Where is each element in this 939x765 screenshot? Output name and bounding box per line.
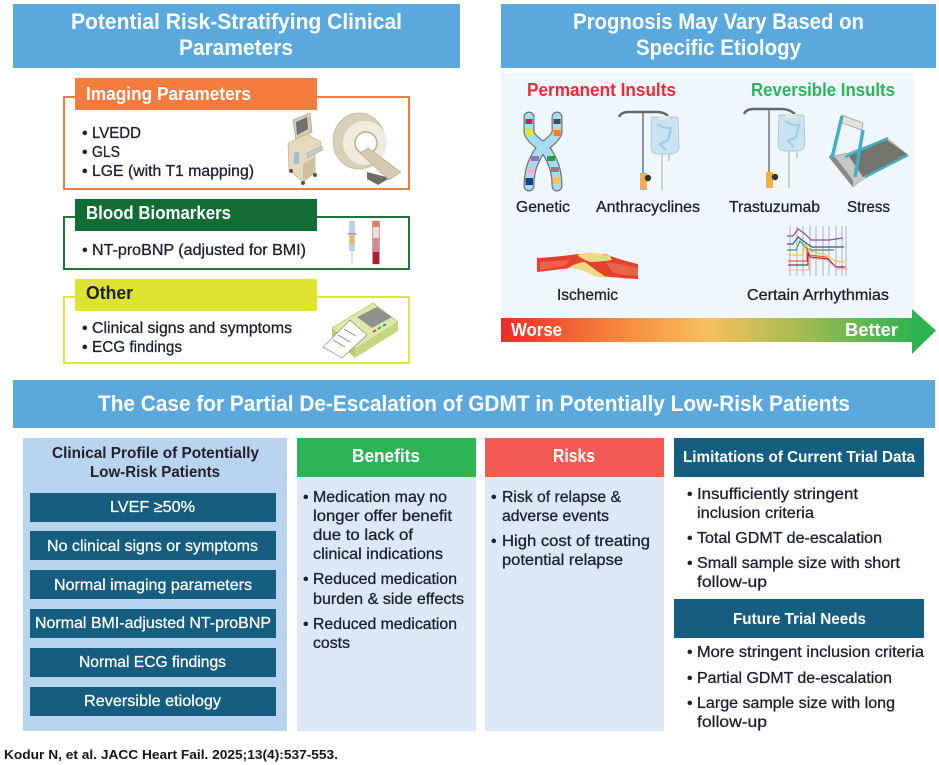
banner: the case for partial de-escalation	[13, 380, 935, 428]
list: risks: •	[491, 533, 497, 550]
list: benefits: due to lack of	[313, 527, 414, 544]
icon: syringe	[348, 221, 356, 265]
heading: reversible insults: Reversible Insults	[751, 80, 895, 100]
card: imaging parameters: LGE (with T1 mapping)	[92, 163, 254, 180]
panel: potential risk-stratifying clinical parameters	[13, 4, 460, 363]
row: reversible etiology	[30, 687, 276, 716]
list: benefits	[303, 489, 464, 652]
list: risks: Risk of relapse &	[502, 489, 621, 506]
list: risks: •	[491, 489, 497, 506]
card: imaging parameters	[64, 78, 409, 189]
list: risks	[491, 489, 650, 569]
list: future needs: Large sample size with long	[697, 695, 895, 712]
list: future needs	[687, 644, 924, 731]
card: imaging parameters: Imaging Parameters	[86, 84, 251, 104]
list: risks: High cost of treating	[502, 533, 650, 550]
list: risks: potential relapse	[502, 552, 623, 569]
arrow: worse to better gradient: Better	[845, 320, 898, 340]
list: benefits: Medication may no	[313, 489, 447, 506]
panel: future trial needs	[674, 599, 924, 731]
card: imaging parameters: •	[82, 125, 88, 142]
heading: prognosis: Specific Etiology	[636, 35, 802, 60]
icon: blood tube	[372, 221, 380, 264]
row: normal NT-proBNP: Normal BMI-adjusted NT-proBNP	[35, 615, 271, 632]
list: benefits: Reduced medication	[313, 571, 457, 588]
list: limitations: Insufficiently stringent	[697, 486, 859, 503]
list: future needs: •	[687, 670, 693, 687]
card: imaging parameters: •	[82, 163, 88, 180]
heading: clinical profile: Clinical Profile of Potentially	[52, 445, 259, 462]
list: future needs: Partial GDMT de-escalation	[697, 670, 892, 687]
card: other: Other	[86, 283, 133, 303]
list: limitations: Small sample size with short	[697, 555, 901, 572]
heading: limitations: Limitations of Current Trial Data	[683, 449, 915, 466]
row: normal imaging	[30, 570, 276, 599]
card: other	[64, 279, 409, 363]
list: benefits: longer offer benefit	[313, 508, 453, 525]
list: benefits: burden & side effects	[313, 591, 464, 608]
icon: ECG machine	[323, 303, 398, 358]
row: normal ECG: Normal ECG findings	[79, 654, 226, 671]
heading: benefits	[297, 438, 476, 477]
row: normal NT-proBNP	[30, 609, 276, 638]
card: imaging parameters: GLS	[92, 144, 120, 161]
list: benefits: clinical indications	[313, 546, 443, 563]
list: limitations: •	[687, 530, 693, 547]
row: normal ECG	[30, 648, 276, 677]
card: blood biomarkers	[64, 199, 409, 269]
panel: clinical profile of low-risk patients	[23, 438, 287, 731]
list: future needs: •	[687, 695, 693, 712]
heading: risk-stratifying parameters: Potential Risk-Stratifying Clinical	[71, 9, 402, 34]
heading: future trial needs: Future Trial Needs	[733, 611, 866, 628]
list: benefits: costs	[313, 635, 350, 652]
icon: arrhythmia waveforms	[787, 226, 848, 276]
heading: risk-stratifying parameters	[13, 4, 460, 68]
row: no clinical signs: No clinical signs or symptoms	[47, 538, 258, 555]
icon: treadmill	[829, 115, 908, 187]
label: ischemic: Ischemic	[557, 287, 618, 304]
list: limitations: Total GDMT de-escalation	[697, 530, 882, 547]
list: benefits: •	[303, 571, 309, 588]
label: genetic: Genetic	[516, 199, 570, 216]
list: benefits: •	[303, 489, 309, 506]
icon: MRI scanner	[333, 113, 401, 185]
icon: chromosome	[526, 117, 560, 186]
list: future needs: More stringent inclusion criteria	[697, 644, 924, 661]
heading: benefits: Benefits	[352, 446, 420, 466]
row: LVEF: LVEF ≥50%	[110, 499, 195, 516]
arrow: worse to better gradient	[501, 309, 936, 354]
list: risks: adverse events	[502, 508, 609, 525]
icon: IV bag (anthracyclines)	[619, 112, 679, 190]
list: benefits: •	[303, 616, 309, 633]
heading: clinical profile: Low-Risk Patients	[90, 464, 220, 481]
label: stress: Stress	[847, 199, 890, 216]
heading: permanent insults: Permanent Insults	[527, 80, 676, 100]
list: limitations: inclusion criteria	[697, 505, 814, 522]
list: future needs: follow-up	[697, 714, 767, 731]
list: limitations: •	[687, 555, 693, 572]
heading: risks: Risks	[553, 446, 595, 466]
icon: ultrasound machine	[288, 113, 323, 185]
card: blood biomarkers: •	[82, 242, 88, 259]
panel: prognosis by etiology	[501, 4, 936, 354]
row: no clinical signs	[30, 531, 276, 560]
heading: risks	[485, 438, 664, 477]
citation: Kodur N, et al. JACC Heart Fail. 2025;13(4):537-553.	[4, 747, 338, 762]
label: certain arrhythmias: Certain Arrhythmias	[747, 287, 889, 304]
list: limitations: follow-up	[697, 574, 767, 591]
heading: prognosis: Prognosis May Vary Based on	[573, 9, 864, 34]
list: limitations: •	[687, 486, 693, 503]
list: future needs: •	[687, 644, 693, 661]
arrow: worse to better gradient: Worse	[511, 320, 562, 340]
panel: limitations of current trial data	[674, 438, 924, 591]
list: benefits: Reduced medication	[313, 616, 457, 633]
panel: benefits	[297, 438, 476, 731]
heading: limitations	[674, 438, 924, 477]
icon: narrowed artery	[537, 253, 638, 279]
heading: clinical profile	[52, 445, 259, 481]
card: imaging parameters: LVEDD	[92, 125, 141, 142]
card: other: Clinical signs and symptoms	[92, 320, 292, 337]
card: other: •	[82, 320, 88, 337]
card: imaging parameters: •	[82, 144, 88, 161]
row: normal imaging: Normal imaging parameters	[54, 577, 252, 594]
row: LVEF	[30, 493, 276, 522]
card: other: •	[82, 339, 88, 356]
card: blood biomarkers: Blood Biomarkers	[86, 203, 231, 223]
row: reversible etiology: Reversible etiology	[84, 693, 221, 710]
list: limitations	[687, 486, 901, 591]
heading: prognosis	[501, 4, 936, 68]
banner: the case for partial de-escalation: The Case for Partial De-Escalation of GDMT in Potentially Low-Risk Patients	[98, 391, 850, 416]
card: blood biomarkers: NT-proBNP (adjusted for BMI)	[92, 242, 306, 259]
card: other: ECG findings	[92, 339, 182, 356]
panel: risks	[485, 438, 664, 731]
heading: risk-stratifying parameters: Parameters	[179, 35, 293, 60]
label: trastuzumab: Trastuzumab	[729, 199, 820, 216]
label: anthracyclines: Anthracyclines	[596, 199, 700, 216]
icon: IV bag (trastuzumab)	[744, 109, 805, 188]
heading: future trial needs	[674, 599, 924, 638]
